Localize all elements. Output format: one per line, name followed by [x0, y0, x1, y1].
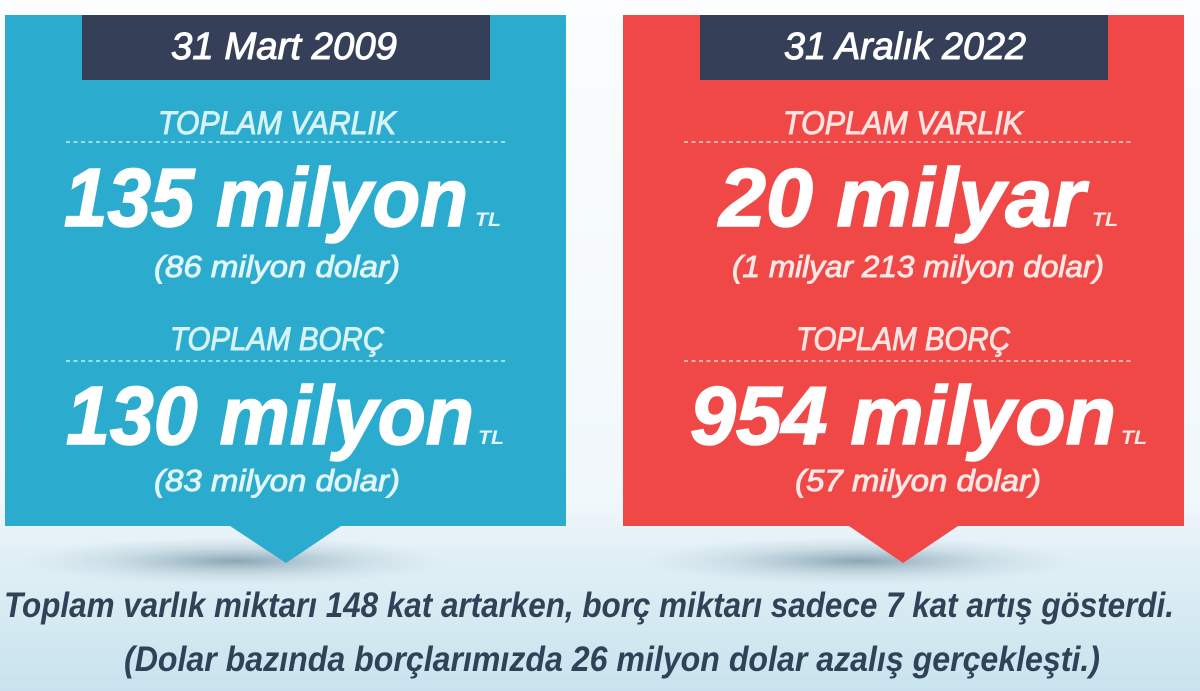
panel: 31 Mart 2009 — [5, 15, 566, 563]
value: 130 milyon TL: 130 milyon — [66, 369, 474, 462]
summary text — [4, 586, 1174, 679]
date banner — [82, 15, 490, 80]
dollar value: 57 milyon dolar: (57 milyon dolar) — [795, 463, 1041, 498]
value: 954 milyon TL: TL — [1121, 428, 1147, 449]
date banner: 31 Mart 2009 — [171, 26, 397, 68]
dollar value: 86 milyon dolar: (86 milyon dolar) — [154, 249, 400, 284]
shadow: right arrow — [640, 537, 1080, 585]
heading: toplam varlık: TOPLAM VARLIK — [158, 105, 398, 141]
dollar value: 1 milyar 213 milyon dolar: (1 milyar 213 milyon dolar) — [732, 249, 1104, 284]
value: 20 milyar TL: TL — [1092, 210, 1118, 231]
summary text: (Dolar bazında borçlarımızda 26 milyon dolar azalış gerçekleşti.) — [124, 640, 1100, 679]
date banner: 31 Aralık 2022 — [784, 26, 1026, 68]
value: 135 milyon TL: 135 milyon — [64, 151, 468, 244]
value: 20 milyar TL: 20 milyar — [717, 151, 1090, 244]
value: 954 milyon TL: 954 milyon — [690, 369, 1116, 462]
value: 135 milyon TL: TL — [475, 210, 501, 231]
panel background: red with arrow — [623, 15, 1184, 563]
date banner — [700, 15, 1108, 80]
heading: toplam borç: TOPLAM BORÇ — [796, 321, 1011, 357]
value: 130 milyon TL: TL — [478, 428, 504, 449]
panel: 31 Aralık 2022 — [623, 15, 1184, 563]
heading: toplam varlık: TOPLAM VARLIK — [783, 105, 1025, 141]
dollar value: 83 milyon dolar: (83 milyon dolar) — [154, 463, 400, 498]
panel background: blue with arrow — [5, 15, 566, 563]
heading: toplam borç: TOPLAM BORÇ — [170, 321, 385, 357]
shadow: left arrow — [20, 537, 450, 585]
